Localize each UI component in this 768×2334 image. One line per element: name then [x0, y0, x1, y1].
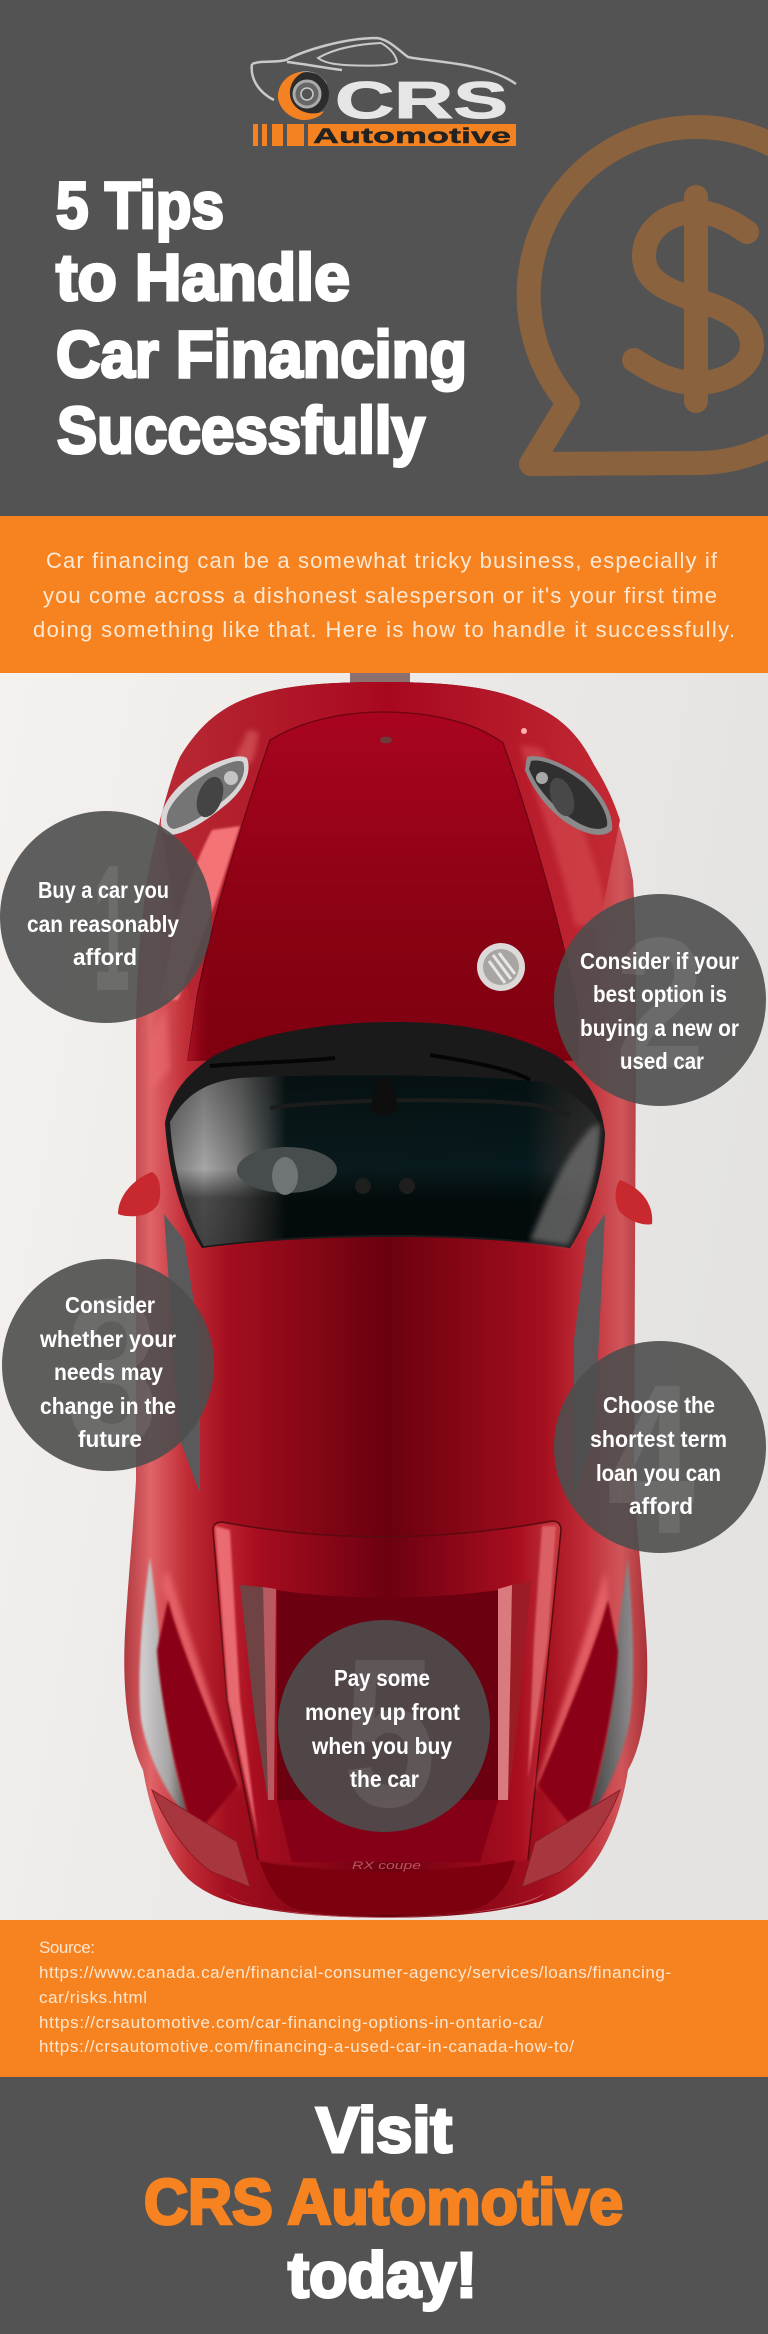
- tip 4 circle: [554, 1340, 766, 1579]
- tip 5 circle: 5: [343, 1614, 436, 1851]
- panel: call to action: [0, 2077, 768, 2334]
- title: Successfully: [57, 393, 425, 467]
- tip 5 circle: the car: [350, 1766, 419, 1792]
- tip 4 circle: loan you can: [596, 1460, 721, 1486]
- mirror right: [615, 1180, 652, 1224]
- source text: Source:: [39, 1938, 95, 1957]
- fuel cap: [477, 943, 525, 991]
- panel: intro band: [0, 516, 768, 673]
- rear quarter reflections: [139, 1557, 190, 1820]
- tail lights: [152, 1790, 250, 1887]
- source text: https://crsautomotive.com/financing-a-used-car-in-canada-how-to/: [39, 2037, 574, 2056]
- panel: sources band: [0, 1920, 768, 2077]
- tip 1 circle: can reasonably: [27, 911, 179, 937]
- tip 3 circle: Consider: [65, 1292, 155, 1318]
- nose: [160, 682, 620, 1000]
- tip 3 circle: future: [78, 1426, 142, 1452]
- tip 3 circle: 3: [66, 1255, 159, 1490]
- rear deck: [213, 1521, 561, 1870]
- intro text: [33, 548, 735, 642]
- call to action text: CRS Automotive: [144, 2166, 623, 2238]
- tip 1 circle: afford: [73, 944, 137, 970]
- headlight right: [525, 756, 612, 835]
- title: Car Financing: [56, 317, 467, 391]
- tip 2 circle: used car: [620, 1048, 704, 1074]
- tip 1 circle: Buy a car you: [38, 877, 169, 903]
- source text: https://crsautomotive.com/car-financing-options-in-ontario-ca/: [39, 2013, 543, 2032]
- windshield: [165, 1022, 605, 1248]
- intro text: you come across a dishonest salesperson or it's your first time: [43, 583, 717, 608]
- tip 3 circle: needs may: [54, 1359, 163, 1385]
- call to action text: today!: [288, 2239, 477, 2311]
- panel: header: [0, 0, 768, 516]
- call to action text: [144, 2094, 623, 2311]
- car body: [124, 682, 647, 1918]
- title: 5 Tips: [56, 168, 224, 242]
- tip 3 circle: whether your: [39, 1326, 176, 1352]
- logo: CRS Automotive: CRS: [335, 72, 508, 130]
- tip 2 circle: 2: [615, 900, 705, 1107]
- logo: CRS Automotive: Automotive: [313, 125, 511, 148]
- call to action text: Visit: [316, 2094, 452, 2166]
- car illustration: [118, 673, 652, 1918]
- source text: https://www.canada.ca/en/financial-consumer-agency/services/loans/financing-: [39, 1963, 671, 1982]
- icon: dollar speech bubble: [529, 127, 768, 464]
- tip 1 circle: 1: [93, 828, 130, 1029]
- tip 2 circle: [554, 894, 766, 1107]
- fender highlights: [160, 826, 240, 1000]
- title: to Handle: [56, 240, 350, 314]
- rear bumper: [260, 1860, 515, 1914]
- tip 2 circle: Consider if your: [580, 948, 739, 974]
- hood badge: [380, 736, 392, 744]
- tip 1 circle: [0, 811, 212, 1029]
- source text: [39, 1938, 671, 2056]
- source text: car/risks.html: [39, 1988, 147, 2007]
- hood panel: [188, 712, 578, 1060]
- tip 2 circle: buying a new or: [580, 1015, 739, 1041]
- tip 2 circle: best option is: [593, 981, 727, 1007]
- panel: car photo: [0, 673, 768, 1920]
- tip 5 circle: when you buy: [311, 1733, 452, 1759]
- tip 5 circle: money up front: [305, 1699, 460, 1725]
- tip 3 circle: [2, 1255, 214, 1490]
- intro text: doing something like that. Here is how to handle it successfully.: [33, 617, 735, 642]
- tip 4 circle: Choose the: [603, 1392, 715, 1418]
- tip 4 circle: 4: [607, 1340, 695, 1579]
- tip 5 circle: Pay some: [334, 1665, 430, 1691]
- tip 5 circle: [278, 1614, 490, 1851]
- intro text: Car financing can be a somewhat tricky business, especially if: [46, 548, 718, 573]
- tip 4 circle: shortest term: [590, 1426, 727, 1452]
- rear badge: RX coupe: [352, 1860, 421, 1872]
- title: [56, 168, 467, 467]
- side glass left and right: [164, 1214, 200, 1494]
- headlight left: [161, 756, 249, 835]
- mirror left: [118, 1172, 160, 1216]
- rear window panel: [277, 1590, 498, 1862]
- tip 4 circle: afford: [629, 1493, 693, 1519]
- tip 3 circle: change in the: [40, 1393, 176, 1419]
- logo: CRS Automotive: [252, 38, 516, 148]
